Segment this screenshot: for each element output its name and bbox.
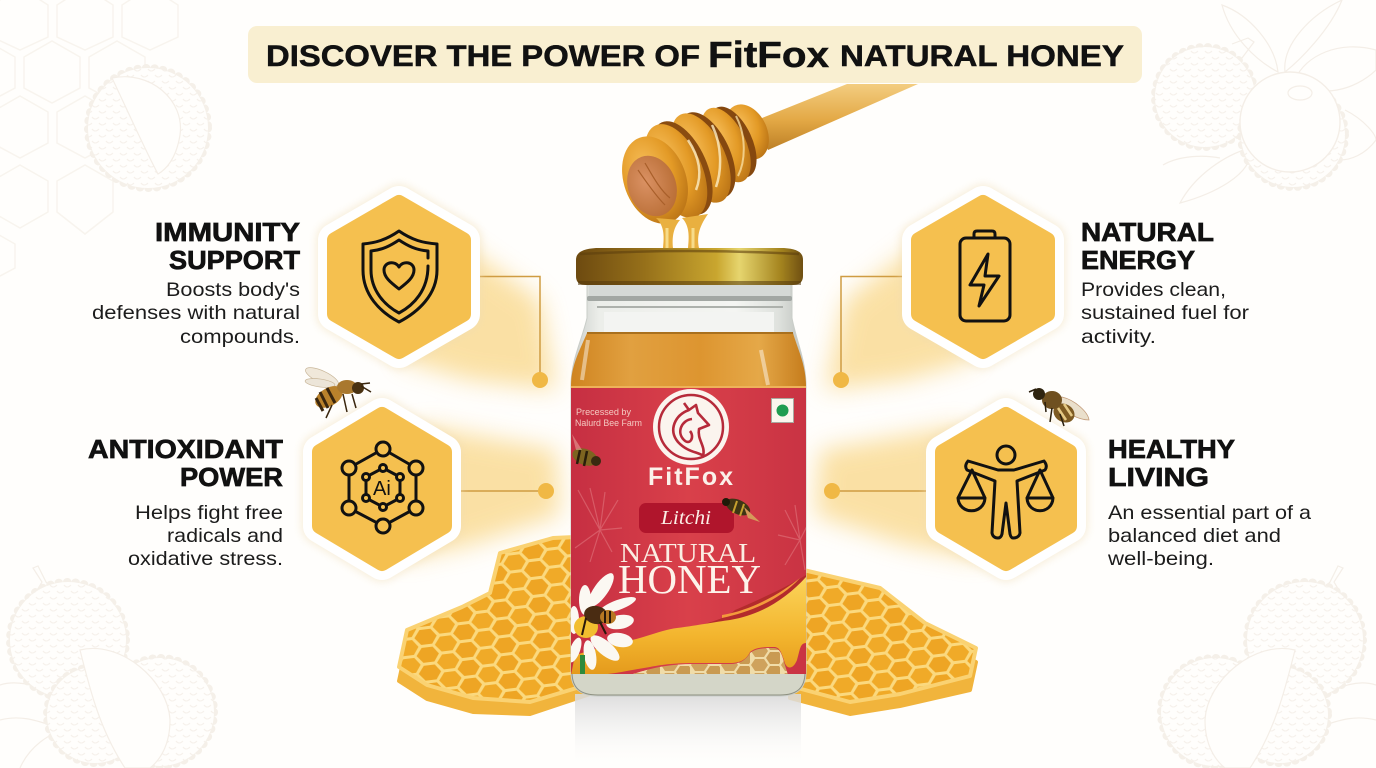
text block: healthy living: An essential part of a	[1108, 502, 1311, 524]
honey wave	[571, 577, 806, 675]
variety pill: Litchi	[660, 507, 711, 529]
text block: healthy living	[1107, 434, 1311, 570]
text block: antioxidant power: radicals and	[167, 525, 283, 547]
text block: antioxidant power: oxidative stress.	[128, 548, 283, 570]
bee: left	[303, 364, 371, 418]
brand name: FitFox	[648, 463, 733, 491]
label bee left	[572, 434, 601, 466]
connector: healthy living	[824, 483, 936, 499]
lychee illustration: bottom left	[0, 566, 214, 768]
text block: immunity support	[92, 217, 300, 348]
text block: immunity support: compounds.	[180, 326, 300, 348]
text block: healthy living: well-being.	[1107, 548, 1214, 570]
text block: antioxidant power	[88, 434, 283, 570]
background hexagon pattern	[0, 0, 178, 283]
label	[566, 386, 815, 675]
label flower decoration	[575, 488, 815, 570]
label flower	[571, 573, 636, 674]
text block: antioxidant power: POWER	[180, 462, 283, 492]
text block: antioxidant power: ANTIOXIDANT	[88, 434, 283, 464]
text block: antioxidant power: Helps fight free	[135, 502, 283, 524]
title banner: DISCOVER THE POWER OF	[266, 40, 700, 73]
jar reflection shadow	[575, 694, 801, 768]
text block: natural energy: NATURAL	[1081, 217, 1214, 247]
glass highlights	[582, 340, 768, 385]
text block: natural energy	[1081, 217, 1250, 348]
honey fill	[571, 333, 806, 386]
lychee illustration: bottom right	[1161, 566, 1376, 768]
text block: healthy living: HEALTHY	[1108, 434, 1235, 464]
text block: immunity support: defenses with natural	[92, 302, 300, 324]
processed by text	[576, 408, 642, 426]
title banner: FitFox	[708, 34, 829, 75]
icon: shield with heart	[363, 231, 437, 322]
processed by text: Precessed by	[576, 407, 632, 417]
icon: molecule with Ai: Ai	[373, 478, 391, 500]
lychee illustration: top right	[1155, 0, 1376, 203]
yellow glow behind hexagons	[400, 240, 985, 560]
processed by text: Nalurd Bee Farm	[575, 418, 642, 428]
connector: antioxidant	[450, 483, 554, 499]
title banner: NATURAL HONEY	[840, 40, 1124, 73]
text block: natural energy: ENERGY	[1081, 245, 1195, 275]
logo	[653, 389, 729, 465]
text block: immunity support: Boosts body's	[166, 279, 300, 301]
variety pill	[639, 503, 734, 533]
icon: molecule with Ai	[342, 442, 423, 533]
connector: energy	[833, 276, 912, 388]
icon: battery with bolt	[960, 231, 1010, 321]
text block: healthy living: LIVING	[1108, 462, 1209, 492]
text block: natural energy: Provides clean,	[1081, 279, 1226, 301]
label bee right	[722, 498, 760, 522]
veg mark	[772, 398, 794, 422]
text block: healthy living: balanced diet and	[1108, 525, 1281, 547]
bee: right	[1029, 388, 1089, 426]
connector: immunity	[470, 276, 548, 388]
comb strip	[630, 648, 788, 675]
hexagon: energy	[919, 203, 1047, 351]
icon: person with scales	[958, 446, 1053, 538]
natural honey text: NATURAL	[620, 538, 756, 568]
jar lid	[576, 248, 803, 285]
right honeycomb	[790, 568, 976, 714]
natural honey text: HONEY	[618, 556, 761, 602]
left honeycomb	[399, 537, 590, 714]
orange streaks	[705, 575, 806, 624]
hexagon: antioxidant	[320, 415, 444, 563]
jar glass body	[571, 285, 806, 696]
hexagon: healthy living	[943, 415, 1069, 563]
title banner	[248, 26, 1142, 83]
honey dipper	[610, 84, 918, 248]
honey jar	[566, 248, 815, 696]
natural honey text	[619, 544, 760, 594]
text block: natural energy: activity.	[1081, 326, 1156, 348]
text block: immunity support: SUPPORT	[169, 245, 300, 275]
lychee illustration: top left	[88, 68, 208, 188]
text block: natural energy: sustained fuel for	[1081, 302, 1250, 324]
hexagon: immunity	[335, 203, 463, 351]
jar neck details	[587, 285, 792, 333]
jar base	[572, 672, 805, 695]
text block: immunity support: IMMUNITY	[155, 217, 300, 247]
